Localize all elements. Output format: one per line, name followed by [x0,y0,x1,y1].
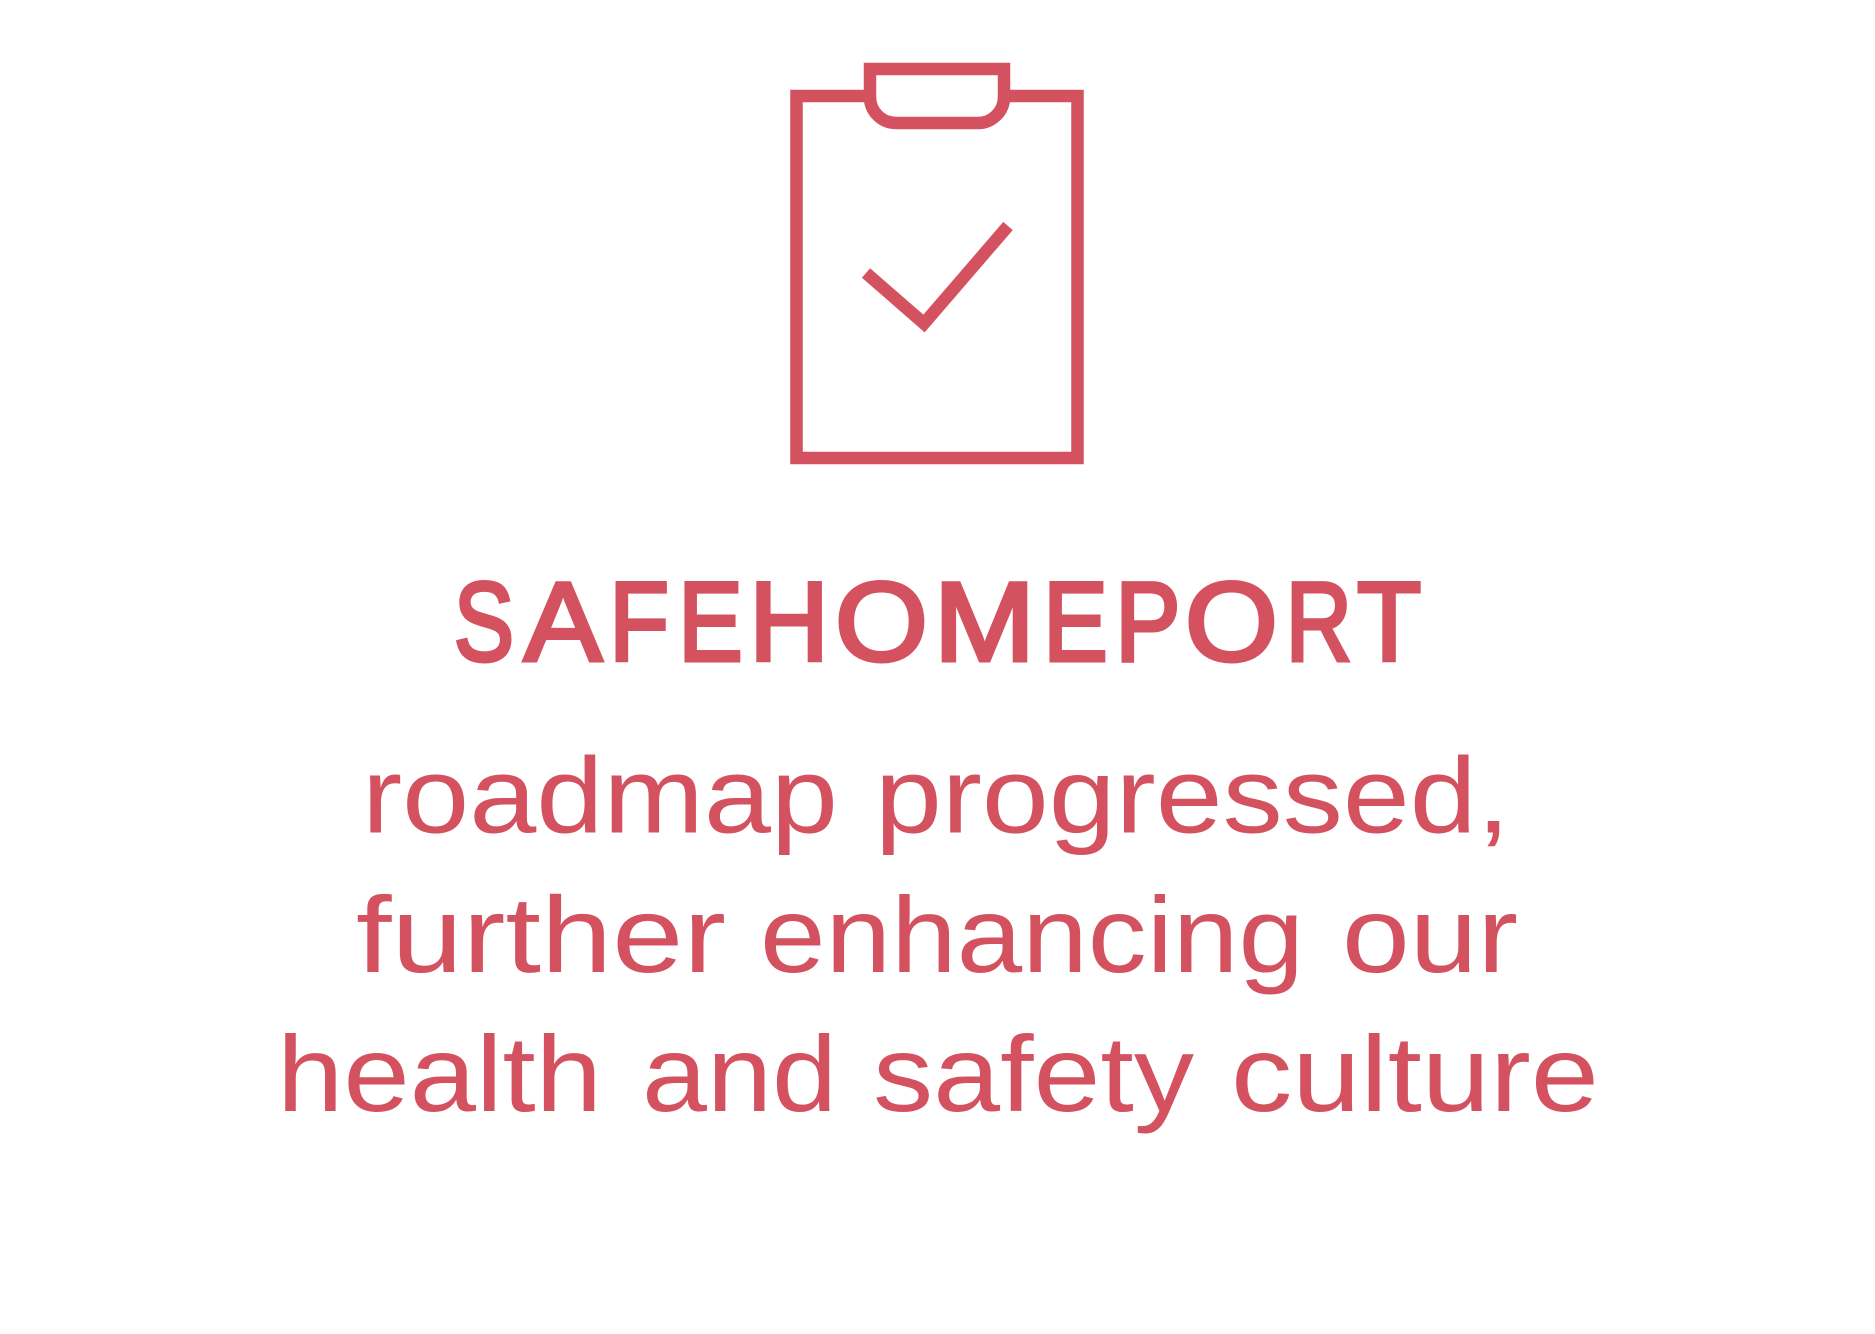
heading: T [1357,560,1421,685]
body text [277,734,1599,1134]
line 1: progressed, [875,734,1510,856]
line 3: safety [873,1013,1194,1134]
line 2: enhancing [760,874,1304,995]
heading: E [1043,560,1108,685]
line 3: and [642,1013,837,1134]
heading: O [835,560,928,685]
heading: A [524,560,602,685]
clipboard body [796,96,1078,458]
line 1: roadmap [362,734,838,856]
line 2: our [1342,874,1518,995]
heading: F [609,560,669,685]
heading: E [678,560,743,685]
line 3: health [277,1013,602,1134]
check mark [866,226,1008,324]
line 3: culture [1231,1013,1599,1134]
heading: S [454,560,514,685]
icon: clipboard with check mark [796,69,1078,458]
clipboard clip [870,69,1004,123]
heading: P [1115,560,1180,685]
heading: O [1185,560,1278,685]
heading: R [1286,560,1352,685]
heading: M [934,560,1035,685]
heading: H [749,560,829,685]
line 2: further [356,874,726,995]
